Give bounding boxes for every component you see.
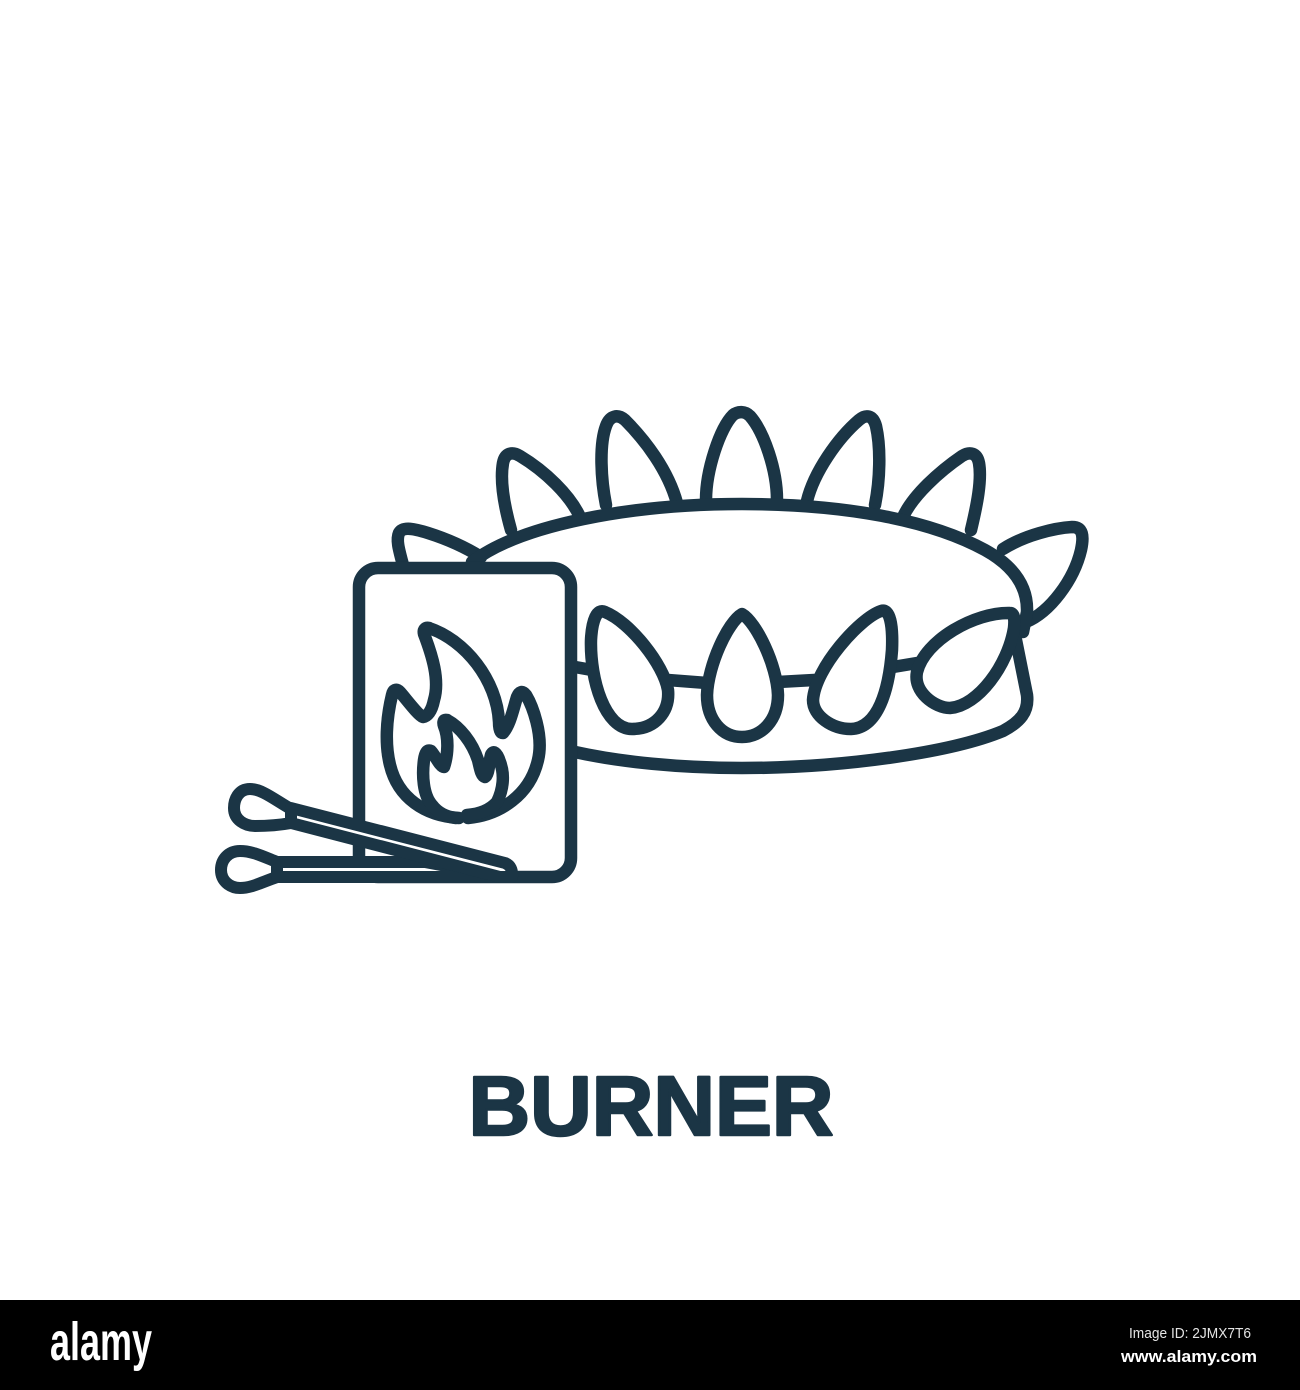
matchbox card <box>359 568 571 877</box>
footer bar <box>0 1300 1300 1390</box>
footer website: www.alamy.com <box>1120 1347 1257 1366</box>
icon: outer flame <box>387 628 540 818</box>
icon: upper match <box>234 789 512 877</box>
footer image id: Image ID: 2JMX7T6 <box>1129 1325 1251 1342</box>
icon: front burner flames <box>591 611 1014 737</box>
footer logo: alamy <box>50 1312 152 1372</box>
icon: inner flame <box>423 720 503 818</box>
icon: lower match <box>221 851 505 888</box>
icon: burner and matchbox <box>398 412 1082 768</box>
icon: matchbox <box>359 568 571 877</box>
icon: upper burner flames <box>398 412 1082 622</box>
title: BURNER <box>468 1059 834 1153</box>
icon: burner ring body <box>472 504 1027 768</box>
